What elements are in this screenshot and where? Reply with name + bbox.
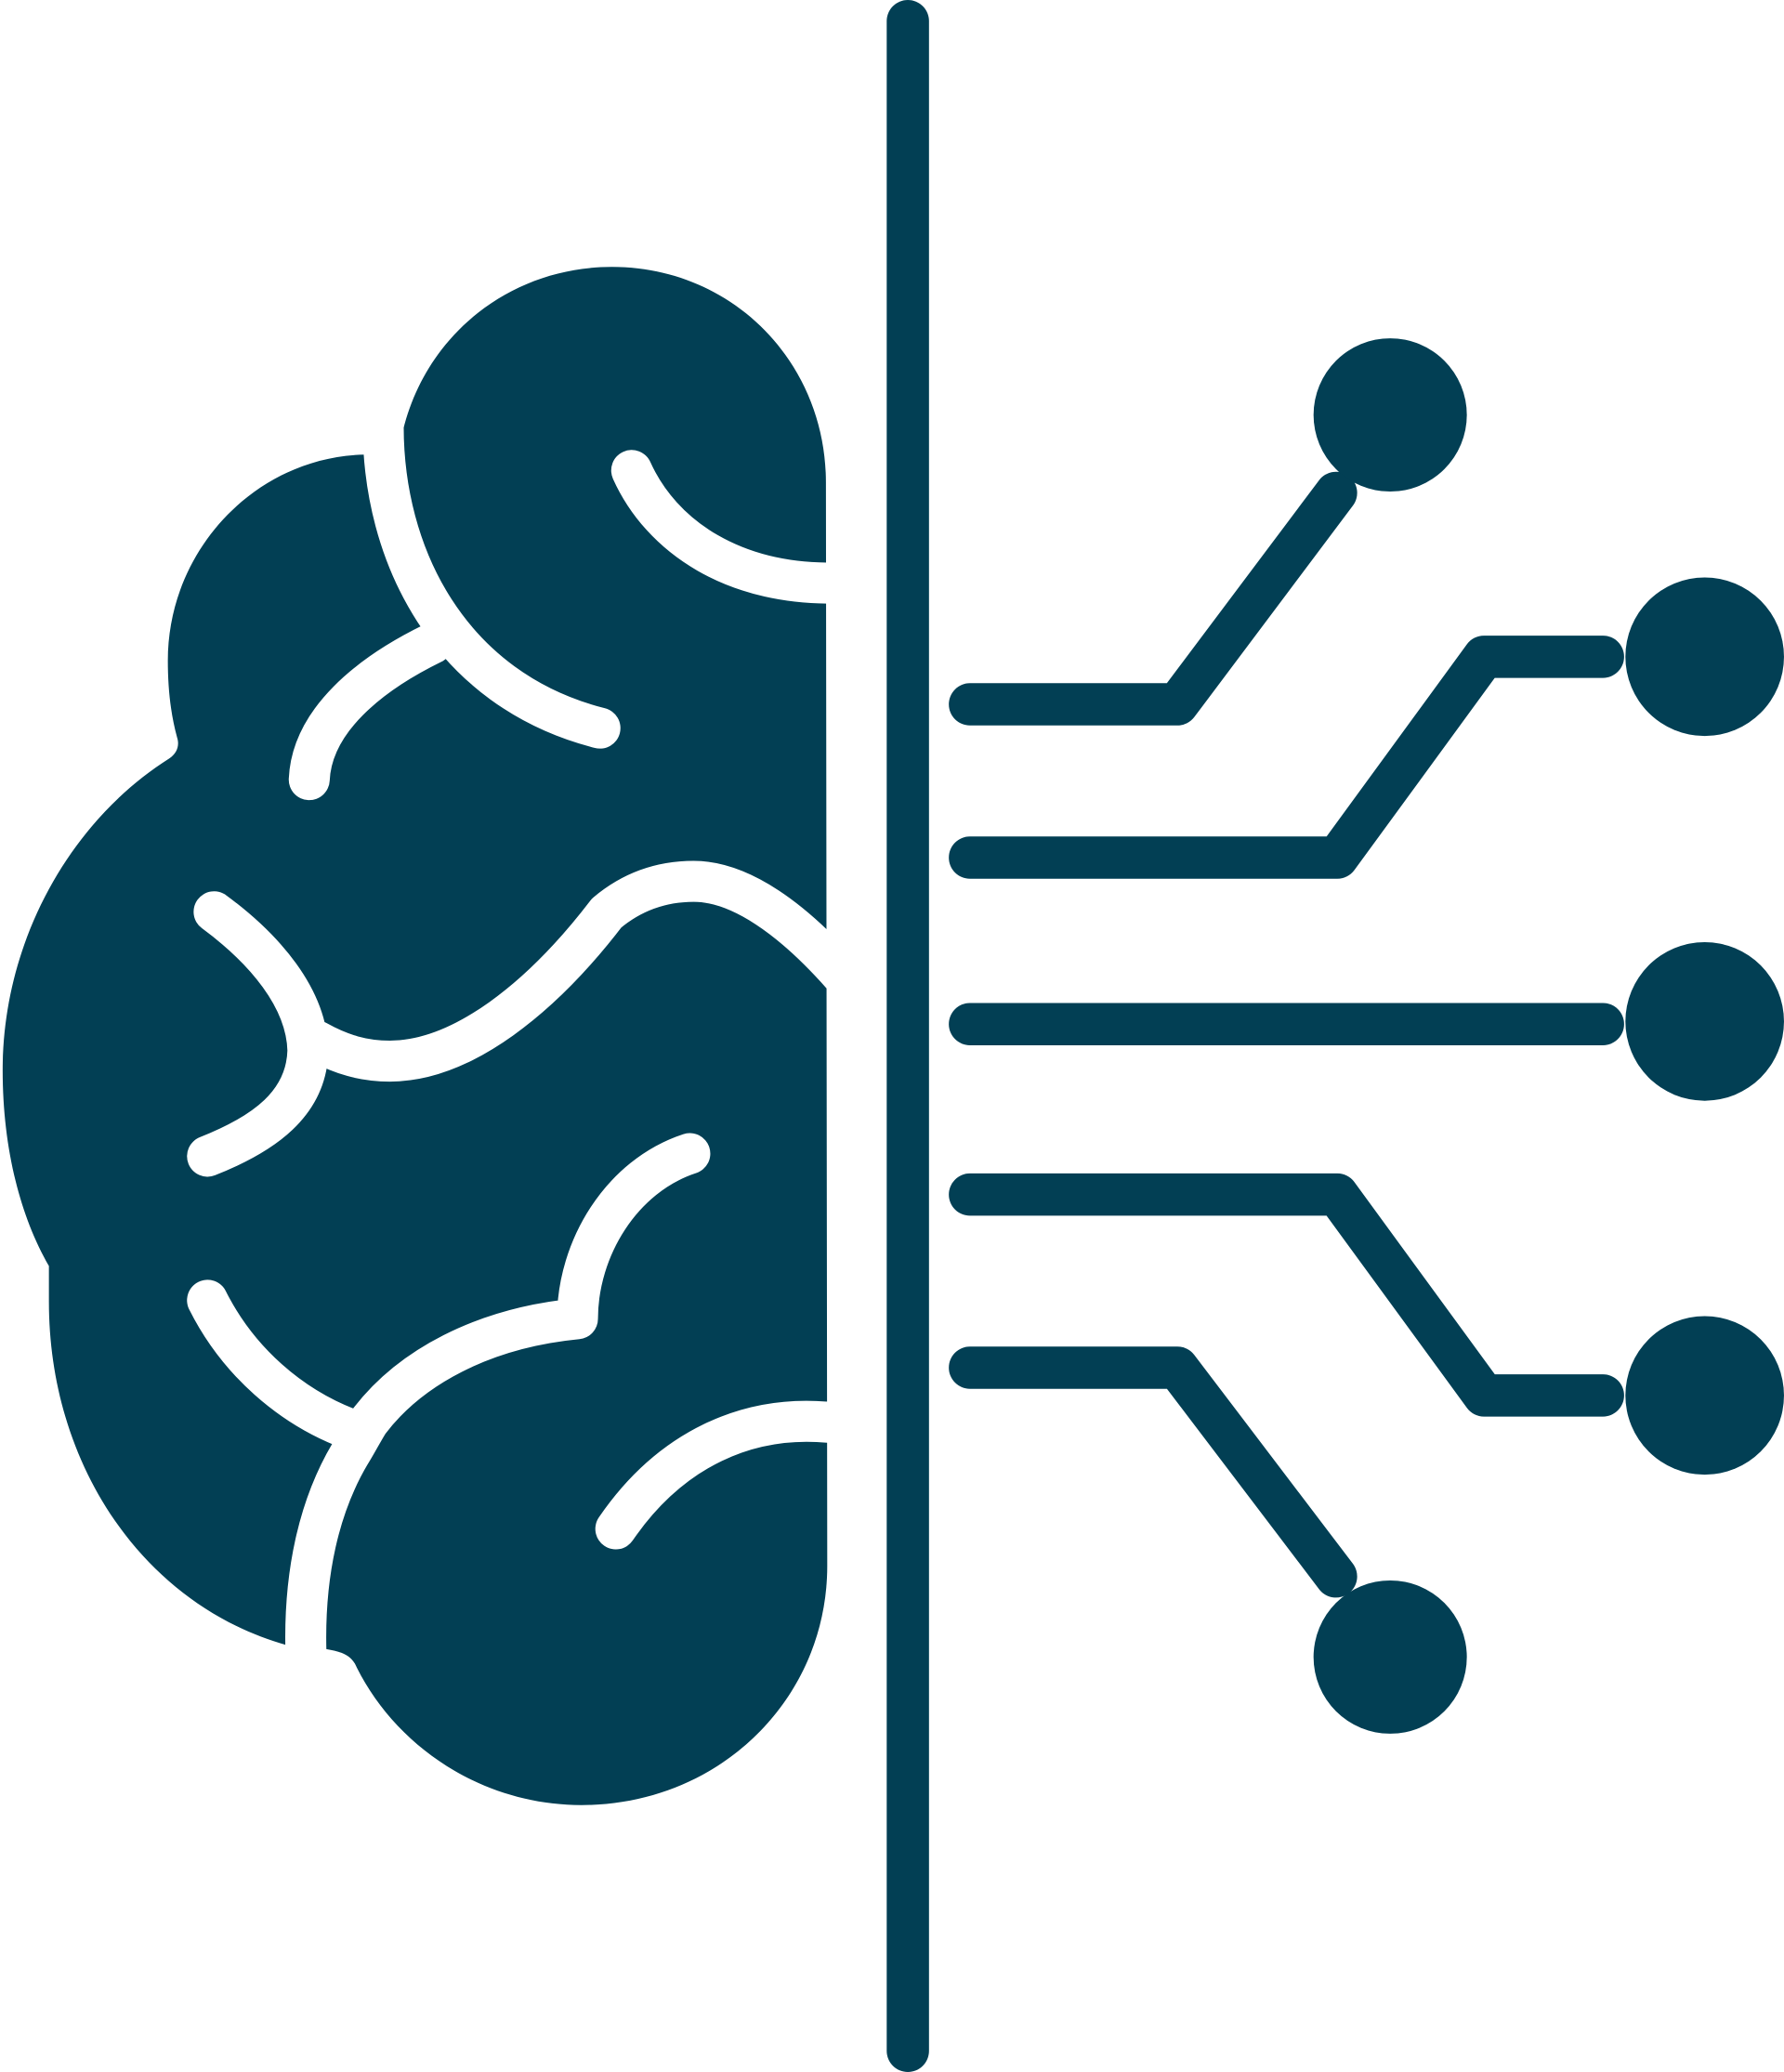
circuit traces (970, 492, 1603, 1577)
icon: circuit half (970, 338, 1784, 1734)
brain fold lines (207, 423, 846, 1668)
brain silhouette (3, 267, 827, 1805)
icon: brain half (3, 267, 846, 1805)
divider: vertical bar (886, 0, 929, 2072)
circuit nodes (1314, 338, 1784, 1734)
